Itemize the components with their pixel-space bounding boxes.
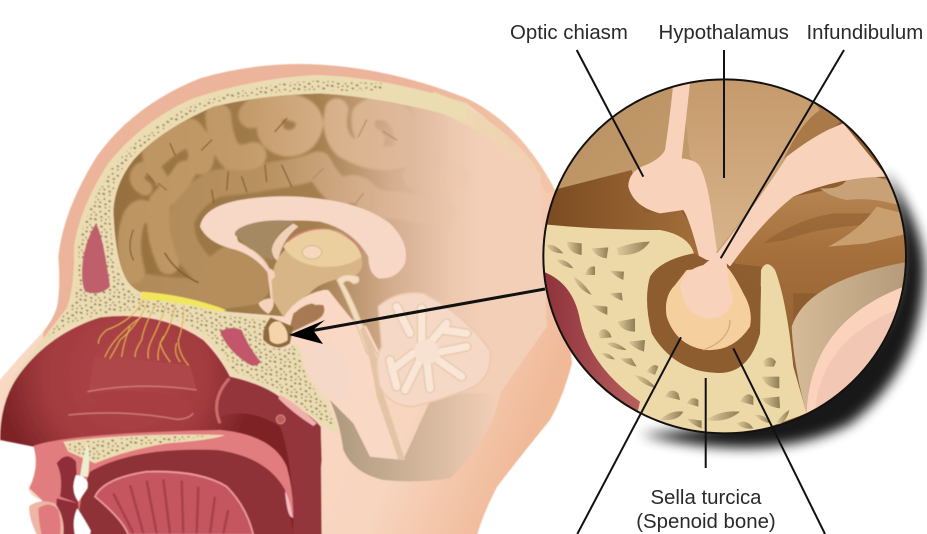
palate bone xyxy=(63,435,225,463)
sella cavity xyxy=(263,317,293,348)
mouth opening column xyxy=(55,462,80,534)
rear skull bone fading xyxy=(433,92,537,170)
label: Infundibulum: Infundibulum xyxy=(806,22,923,44)
arbor vitae outline xyxy=(390,307,467,390)
top right shadow tissue xyxy=(784,104,840,158)
gyrus: rear xyxy=(417,107,457,182)
pons outer xyxy=(792,262,905,413)
midbrain cavity xyxy=(288,305,324,333)
brown lobe beneath callosum xyxy=(197,248,268,308)
leader: anterior lobe xyxy=(577,337,681,534)
pituitary in sella turcica xyxy=(263,317,293,348)
leader: posterior lobe xyxy=(733,348,825,534)
right dark fold xyxy=(764,214,871,243)
right tan wedge xyxy=(828,207,908,247)
corpus callosum xyxy=(200,196,406,278)
gyrus: inner band xyxy=(181,165,443,275)
gyrus: big curl xyxy=(335,108,407,159)
label: Optic chiasm: Optic chiasm xyxy=(510,22,628,44)
lips and teeth xyxy=(29,443,91,534)
bone pores xyxy=(547,242,789,429)
arrow shaft xyxy=(310,289,545,331)
outer scalp band xyxy=(43,64,555,338)
leader: sella turcica xyxy=(705,378,707,468)
lower lip xyxy=(29,501,64,534)
upper left tan tissue xyxy=(558,88,692,189)
gyrus: top fold xyxy=(252,107,310,143)
thalamus outline xyxy=(283,228,362,267)
fornix xyxy=(272,223,298,261)
label: Hypothalamus: Hypothalamus xyxy=(658,22,789,44)
skull bone xyxy=(0,75,467,435)
shadow along band xyxy=(717,158,785,253)
gyrus: small loop xyxy=(137,168,160,188)
massa intermedia xyxy=(302,246,322,259)
brainstem xyxy=(280,290,405,460)
lower incisor xyxy=(74,508,91,534)
arrowhead xyxy=(289,320,325,344)
head skin silhouette xyxy=(0,64,572,534)
right upper tan fold xyxy=(820,177,897,205)
eustachian opening xyxy=(276,415,285,424)
gyrus: left column xyxy=(129,211,143,272)
anterior pituitary xyxy=(666,267,751,350)
gyrus: upper left xyxy=(155,132,201,162)
gyrus: upper centre xyxy=(218,117,253,157)
palate speckles xyxy=(67,436,207,460)
cortical gyri xyxy=(129,107,457,293)
pituitary division xyxy=(703,320,730,350)
dark band under chiasm xyxy=(548,170,699,256)
pons xyxy=(302,343,350,402)
arbor vitae white xyxy=(390,307,467,390)
upper incisor root xyxy=(80,443,89,477)
gyrus: bottom lobe xyxy=(133,258,255,293)
pineal and tectum xyxy=(337,275,380,360)
magnified pituitary circle xyxy=(537,77,910,443)
pink stalk upper xyxy=(628,83,718,260)
soft fold xyxy=(217,378,229,423)
cerebellum body xyxy=(377,293,490,407)
label: Sella turcica (Spenoid bone): (Spenoid bone) xyxy=(636,511,776,533)
lower concha xyxy=(68,391,193,418)
posterior pituitary xyxy=(680,257,733,318)
label: Sella turcica (Spenoid bone): Sella turcica xyxy=(650,487,762,509)
lateral ventricle xyxy=(235,220,295,260)
circle outline xyxy=(543,79,906,433)
leader: infundibulum xyxy=(721,50,844,258)
olfactory bulb xyxy=(142,292,227,312)
infundibulum band xyxy=(713,123,887,267)
frontal sinus xyxy=(82,223,110,293)
upper incisor xyxy=(73,475,88,502)
septum stalk and pituitary stalk xyxy=(250,248,275,314)
cerebrum base xyxy=(113,93,547,393)
lower head shadow and brain base xyxy=(330,393,500,481)
cerebellar core xyxy=(414,339,439,364)
sphenoid bone xyxy=(537,224,807,440)
leader: hypothalamus xyxy=(723,50,725,178)
pons pink band xyxy=(806,288,902,413)
hypothalamus xyxy=(680,77,837,257)
tongue body xyxy=(95,472,253,534)
lower lip pink xyxy=(38,505,61,534)
concha highlight xyxy=(68,413,193,419)
olfactory nerves xyxy=(98,300,188,365)
diencephalon xyxy=(272,236,362,317)
upper lip slot xyxy=(57,456,78,503)
aqueduct channel xyxy=(360,327,405,460)
tongue muscle fibres xyxy=(113,479,228,533)
tongue xyxy=(95,472,253,534)
arrow to pituitary xyxy=(289,289,545,344)
sulcal detail lines xyxy=(130,118,397,283)
red arc fornix xyxy=(287,228,363,255)
pink adenoid tissue xyxy=(278,395,317,426)
head cross-section illustration xyxy=(0,64,572,534)
brain xyxy=(113,93,547,460)
hard palate pink xyxy=(29,430,293,534)
circle artwork xyxy=(537,77,910,443)
posterior nasal wall xyxy=(219,377,322,534)
nasal cavity xyxy=(0,316,322,534)
gyrus: second column xyxy=(158,172,185,263)
gland xyxy=(269,321,288,344)
bone speckles xyxy=(47,81,383,428)
sella cavity xyxy=(647,253,761,373)
sphenoid sinus xyxy=(220,328,261,366)
red sinus xyxy=(545,272,640,411)
drop shadow of magnified circle xyxy=(640,170,924,448)
pons inner xyxy=(816,310,896,408)
leader lines xyxy=(577,50,844,534)
cerebellum xyxy=(377,293,490,407)
uvula highlight xyxy=(285,492,293,517)
leader: optic chiasm xyxy=(577,50,643,177)
right brown tissue xyxy=(734,178,905,326)
circle base xyxy=(592,122,886,428)
oral cavity xyxy=(79,450,294,534)
upper concha xyxy=(88,357,197,392)
upper concha edge xyxy=(87,386,197,392)
